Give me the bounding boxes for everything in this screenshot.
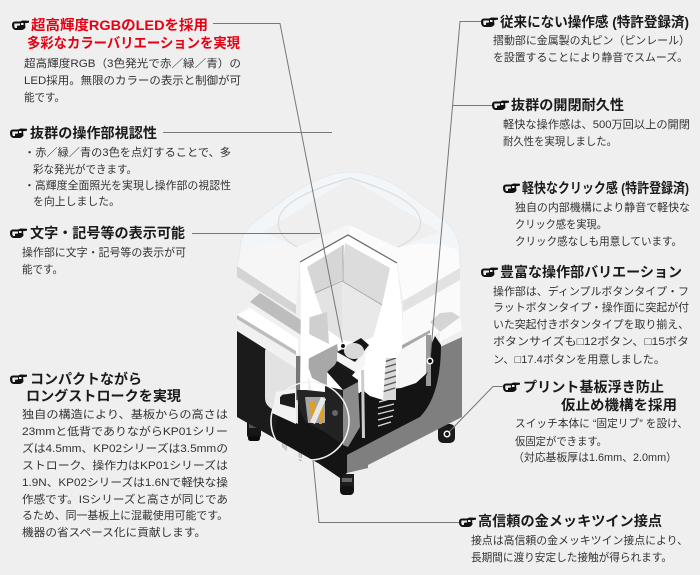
detail circle <box>271 382 349 460</box>
right grey face <box>347 337 462 473</box>
cap inner edge <box>300 235 397 263</box>
panel: durability <box>492 97 690 148</box>
left black face <box>237 330 318 463</box>
body text: ・赤／緑／青の3色を点灯することで、多 <box>24 145 231 159</box>
centre foot <box>340 474 354 495</box>
icon: pointing hand <box>459 518 476 527</box>
icon: pointing hand <box>492 100 509 110</box>
panel: operation visibility <box>10 125 231 208</box>
left cap wedge <box>237 225 348 308</box>
body text: 長期間に渡り安定した接触が得られます。 <box>471 550 672 564</box>
right interior wall <box>397 335 428 392</box>
body text: LED採用。無限のカラーの表示と制御が可 <box>24 73 241 87</box>
heading: 仮止め機構を採用 <box>561 397 677 413</box>
heading: プリント基板浮き防止 <box>523 379 664 395</box>
leader line: gold contact <box>313 460 459 522</box>
heading: 超高輝度RGBのLEDを採用 <box>31 17 208 33</box>
body text: 能です。 <box>22 262 63 276</box>
body text: 超高輝度RGB（3色発光で赤／緑／青）の <box>24 56 241 70</box>
body text: ン、□17.4ボタンを用意しました。 <box>493 353 665 366</box>
black base and arc <box>272 336 441 478</box>
icon: pointing hand <box>481 268 498 277</box>
icon: pointing hand <box>10 374 27 384</box>
left white panel <box>265 348 298 424</box>
body text: を設置することにより静音でスムーズ。 <box>493 50 688 64</box>
body text: 耐久性を実現しました。 <box>503 134 617 148</box>
heading: 抜群の開閉耐久性 <box>511 97 624 113</box>
body text: 操作部に文字・記号等の表示が可 <box>22 245 186 259</box>
body text: ラットボタンタイプ・操作面に突起が付 <box>493 300 689 314</box>
dot: retention rib <box>444 431 450 437</box>
funnel: upper left plane <box>307 245 343 293</box>
right upper faces <box>400 280 462 352</box>
body text: 23mmと低背でありながらKP01シリー <box>22 424 228 438</box>
dot: pin rail <box>427 358 433 364</box>
panel: click feel <box>503 180 690 248</box>
heading <box>26 371 181 404</box>
icon: pointing hand <box>10 228 27 238</box>
contact pins <box>282 436 302 461</box>
panel: ultra bright RGB LED <box>12 17 241 104</box>
body text <box>471 533 688 564</box>
body text: るため、同一基板上に混載使用可能です。 <box>22 508 228 522</box>
heading <box>523 379 677 413</box>
body text: スイッチ本体に “固定リブ” を設け、 <box>515 416 688 430</box>
heading: 高信頼の金メッキツイン接点 <box>478 513 662 529</box>
body text: 機器の省スペース化に貢献します。 <box>22 525 206 539</box>
body text: 軽快な操作感は、500万回以上の開閉 <box>503 117 690 131</box>
body text: 1.9N、KP02シリーズは1.6Nで軽快な操 <box>22 475 228 489</box>
heading: ロングストロークを実現 <box>26 388 181 404</box>
dome <box>237 172 460 308</box>
heading: 文字・記号等の表示可能 <box>30 225 185 241</box>
icon: pointing hand <box>503 382 520 392</box>
leader line: feel and durability <box>430 22 492 361</box>
body text: ズは4.5mm、KP02シリーズは3.5mmの <box>22 441 228 455</box>
heading: 多彩なカラーバリエーションを実現 <box>27 35 240 51</box>
dome top plate <box>263 178 440 248</box>
funnel: lower left plane <box>315 281 342 340</box>
body text: を向上しました。 <box>33 194 120 208</box>
body text: 作感です。ISシリーズと高さが同じであ <box>22 492 228 506</box>
body text: ・高輝度全面照光を実現し操作部の視認性 <box>24 178 231 192</box>
interior back wall <box>300 235 402 392</box>
body text: 仮固定ができます。 <box>515 434 607 448</box>
body text: 摺動部に金属製の丸ピン（ピンレール） <box>493 33 690 47</box>
heading <box>27 17 240 51</box>
centre white column <box>300 276 310 400</box>
leader line: marking <box>192 232 320 234</box>
body text: クリック感を実現。 <box>515 217 607 231</box>
icon: pointing hand <box>10 128 27 138</box>
body text <box>513 416 688 464</box>
heading: 抜群の操作部視認性 <box>30 125 157 141</box>
right skirt <box>403 268 460 312</box>
white slider <box>365 336 401 400</box>
spring <box>378 358 396 426</box>
grey tile <box>307 312 329 344</box>
body text: （対応基板厚は1.6mm、2.0mm） <box>513 450 677 464</box>
body text <box>493 284 689 366</box>
funnel: upper right plane <box>342 243 390 305</box>
detail circle content <box>272 388 326 432</box>
left foot <box>247 420 261 441</box>
right cap wedge <box>349 225 460 302</box>
side pin <box>361 370 365 438</box>
body text <box>515 200 690 248</box>
heading: 従来にない操作感 (特許登録済) <box>500 14 689 30</box>
funnel: lower right plane <box>342 281 382 343</box>
metal plate <box>306 344 340 386</box>
body text: 能です。 <box>24 90 65 104</box>
body text: 接点は高信頼の金メッキツイン接点により、 <box>471 533 688 547</box>
leader line: RGB LED <box>213 24 343 346</box>
body text <box>24 56 241 104</box>
panel: gold contact <box>459 513 688 564</box>
dome dish <box>278 178 421 247</box>
icon: pointing hand <box>503 184 520 193</box>
illustration: cutaway key switch <box>237 172 462 495</box>
icon: pointing hand <box>481 18 498 27</box>
heading: 豊富な操作部バリエーション <box>500 264 682 280</box>
panel: button variations <box>481 264 689 366</box>
body text <box>493 33 690 64</box>
panel: marking <box>10 225 186 276</box>
heading: コンパクトながら <box>30 371 142 387</box>
body text: 独自の内部機構により静音で軽快な <box>515 200 690 214</box>
black floor <box>360 372 428 440</box>
leader line: board retention <box>448 386 503 433</box>
panel: board retention <box>503 379 688 464</box>
left skirt <box>237 266 296 314</box>
contact block <box>325 364 360 447</box>
panel: new operation feel <box>481 14 690 64</box>
body text: いた突起付きボタンタイプを取り揃え、 <box>493 318 689 331</box>
body text <box>24 145 231 208</box>
body text: 彩な発光ができます。 <box>33 162 137 176</box>
body text: 操作部は、ディンプルボタンタイプ・フ <box>493 284 689 298</box>
socket <box>331 338 369 383</box>
left upper faces <box>237 293 302 372</box>
leader line: visibility <box>163 132 332 134</box>
body text <box>22 407 228 539</box>
icon: pointing hand <box>12 20 29 30</box>
dot: RGB LED <box>340 343 346 349</box>
body text: ボタンサイズも□12ボタン、□15ボタ <box>493 334 689 348</box>
body text <box>22 245 186 276</box>
panel: compact long stroke <box>10 371 228 539</box>
body text: クリック感なしも用意しています。 <box>515 234 682 248</box>
dark side strip <box>296 356 301 400</box>
body text: ストローク、操作力はKP01シリーズは <box>22 458 228 472</box>
body text: 独自の構造により、基板からの高さは <box>22 407 228 421</box>
body text <box>503 117 690 148</box>
right foot <box>438 424 455 443</box>
